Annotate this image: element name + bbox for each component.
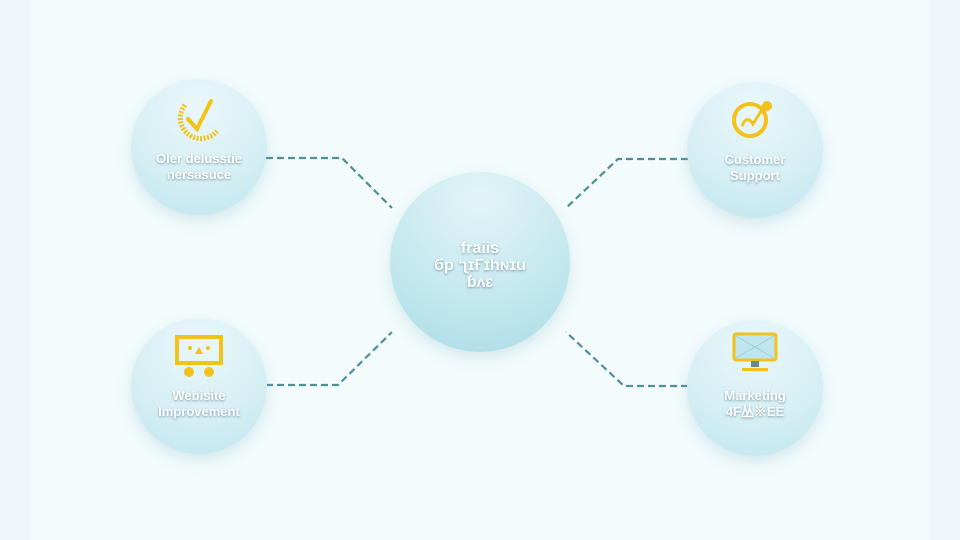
label: nersasuce (167, 167, 231, 182)
node: bottom left (131, 318, 267, 454)
label (724, 152, 786, 184)
node: top left (131, 79, 267, 215)
icon: target (732, 101, 772, 138)
node: bottom right (687, 320, 823, 456)
icon: check gear (178, 98, 219, 142)
center text: fraiis (461, 240, 499, 257)
center circle (390, 172, 570, 352)
label: 4F丛※EE (726, 404, 784, 419)
label: Webisite (172, 388, 226, 403)
label: Marketing (724, 388, 786, 403)
icon: computer (732, 332, 778, 371)
label: Improvement (158, 404, 240, 419)
center text: бр ʻʅɪҒɪhɴɪu (434, 257, 526, 274)
node: top right (687, 82, 823, 218)
label (158, 388, 240, 420)
center text: ɓʌɛ (467, 274, 493, 291)
icon: monitor (175, 335, 223, 377)
label (724, 388, 786, 420)
label: Support (730, 168, 780, 183)
label: Customer (725, 152, 785, 167)
label: Oler delusstie (156, 151, 242, 166)
center text (434, 240, 526, 291)
label (155, 151, 242, 182)
